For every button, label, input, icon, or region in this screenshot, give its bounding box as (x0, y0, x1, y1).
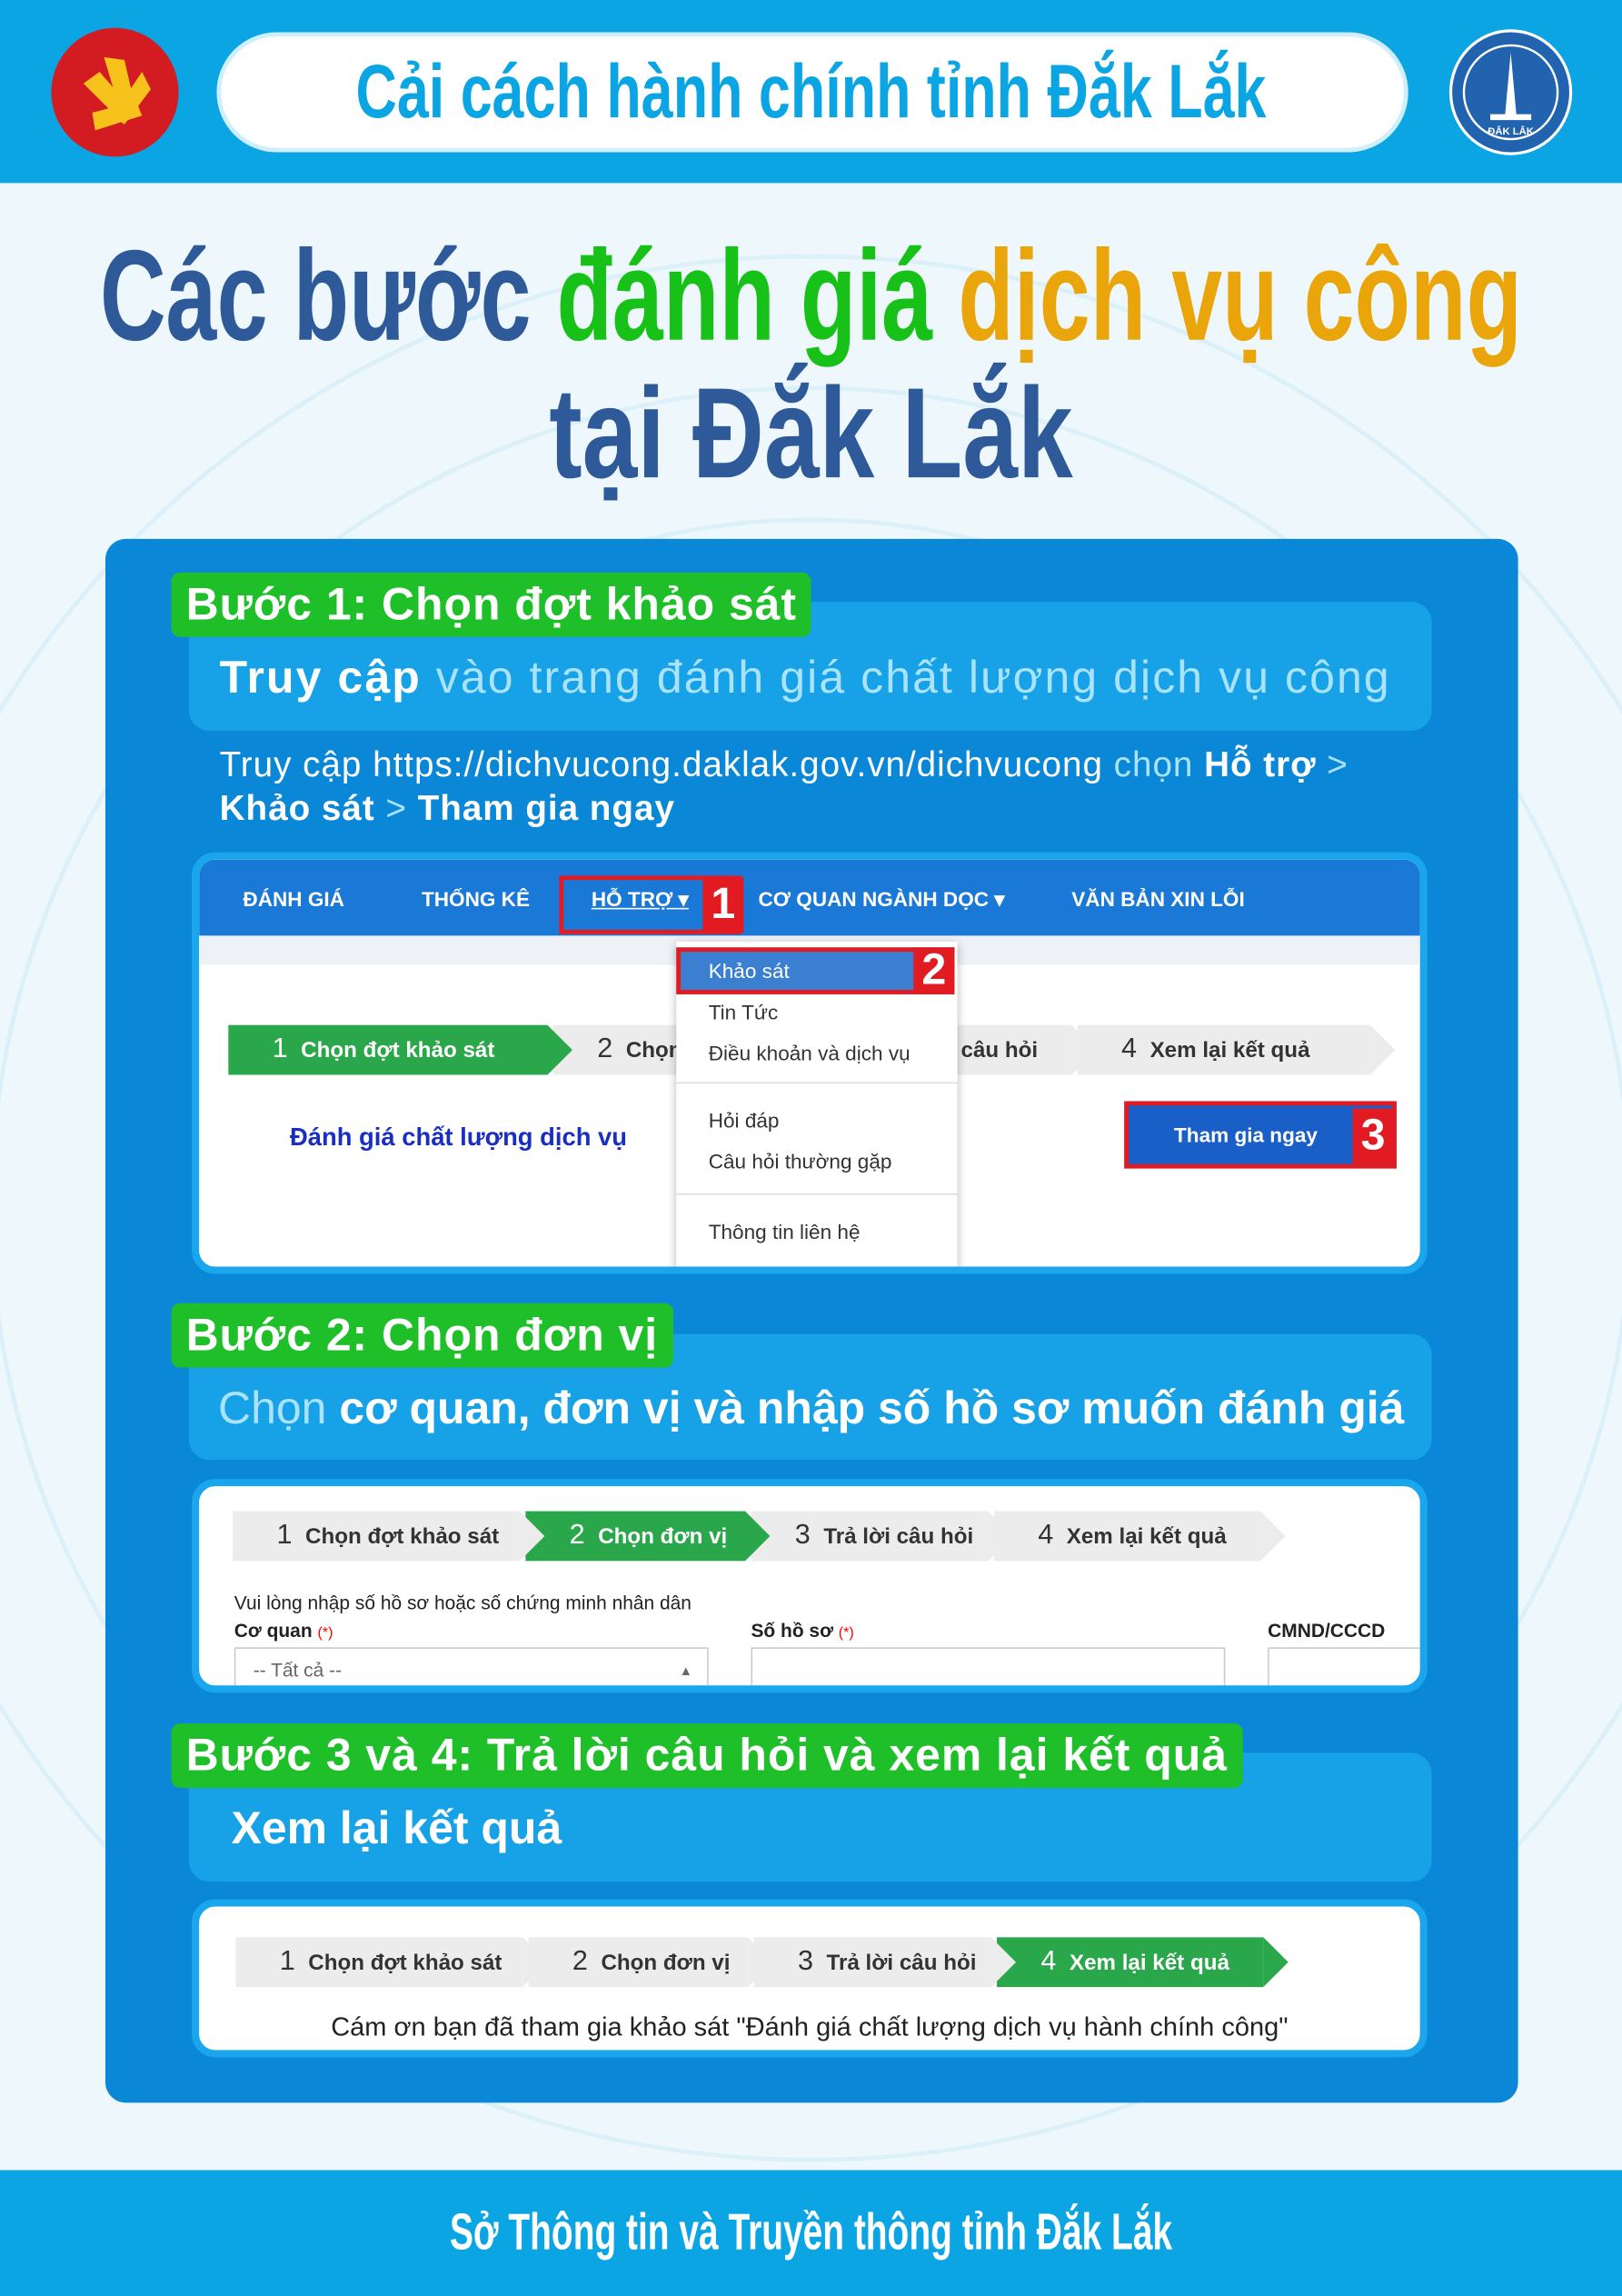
footer text: Sở Thông tin và Truyền thông tỉnh Đắk Lắk (450, 2204, 1172, 2261)
screenshot 3 (192, 1899, 1428, 2057)
screenshot 3: 3 Trả lời câu hỏi (798, 1946, 976, 1977)
screenshot 2: 4 Xem lại kết quả (1038, 1520, 1227, 1551)
nav bar: CƠ QUAN NGÀNH DỌC ▾ (758, 887, 1005, 911)
screenshot 2: CMND/CCCD (1268, 1620, 1385, 1642)
screenshot 1: 3 (1361, 1112, 1386, 1160)
progress steps: 1 Chọn đợt khảo sát (273, 1033, 494, 1064)
footer (0, 2171, 1622, 2296)
progress steps (228, 1025, 1395, 1074)
screenshot 3: 4 Xem lại kết quả (1040, 1946, 1229, 1977)
button: Tham gia ngay: Tham gia ngay (1174, 1123, 1318, 1146)
dropdown: Câu hỏi thường gặp (709, 1150, 891, 1173)
dropdown: Điều khoản và dịch vụ (709, 1041, 911, 1064)
step 1 subtitle (189, 602, 1432, 731)
dropdown (676, 942, 958, 1282)
nav bar (199, 860, 1428, 935)
icon: left logo (51, 28, 179, 156)
icon: right logo (1449, 29, 1572, 155)
main panel (105, 539, 1518, 2102)
step 1 url text: Khảo sát > Tham gia ngay (220, 789, 675, 829)
step 2 label: Bước 2: Chọn đơn vị (186, 1309, 658, 1361)
dropdown: Thông tin liên hệ (709, 1220, 861, 1243)
screenshot 1 (192, 853, 1428, 1274)
step 3-4 label: Bước 3 và 4: Trả lời câu hỏi và xem lại kết quả (186, 1730, 1228, 1781)
screenshot 1: Đánh giá chất lượng dịch vụ (290, 1123, 627, 1151)
progress steps: 4 Xem lại kết quả (1121, 1033, 1310, 1064)
screenshot 2 (192, 1479, 1428, 1692)
step 2 subtitle (189, 1334, 1432, 1460)
nav bar: HỖ TRỢ ▾ (592, 887, 689, 911)
nav bar: THỐNG KÊ (422, 887, 530, 911)
nav bar: ĐÁNH GIÁ (243, 887, 344, 911)
dropdown: Hỏi đáp (709, 1109, 779, 1132)
step 1 url text (220, 744, 1348, 829)
screenshot 2: 1 Chọn đợt khảo sát (276, 1520, 499, 1551)
screenshot 2: Cơ quan (*) (234, 1620, 333, 1642)
dropdown: Tin Tức (709, 1000, 778, 1023)
step 3-4 subtitle: Xem lại kết quả (232, 1802, 562, 1854)
header title pill (216, 32, 1408, 153)
nav bar: 1 (711, 880, 735, 928)
title line 1: Các bước đánh giá dịch vụ công (100, 223, 1522, 367)
icon: right logo: ĐẮK LẮK (1488, 125, 1535, 137)
progress steps: 2 Chọn đơn vị (597, 1033, 755, 1064)
screenshot 2: 2 Chọn đơn vị (570, 1520, 727, 1551)
screenshot 2: ▲ (680, 1663, 692, 1678)
screenshot 3: 2 Chọn đơn vị (572, 1946, 730, 1977)
header title text: Cải cách hành chính tỉnh Đắk Lắk (355, 50, 1266, 135)
header band (0, 0, 1622, 183)
step 1 label: Bước 1: Chọn đợt khảo sát (186, 578, 797, 630)
screenshot 2: -- Tất cả -- (254, 1659, 342, 1681)
title line 2: tại Đắk Lắk (549, 360, 1073, 505)
dropdown: Khảo sát (709, 959, 790, 983)
screenshot 3: 1 Chọn đợt khảo sát (280, 1946, 502, 1977)
screenshot 2: 3 Trả lời câu hỏi (795, 1520, 973, 1551)
step 1 subtitle: Truy cập vào trang đánh giá chất lượng dịch vụ công (220, 652, 1391, 703)
step 3-4 subtitle (189, 1752, 1432, 1882)
screenshot 3: Cám ơn bạn đã tham gia khảo sát "Đánh giá chất lượng dịch vụ hành chính công" (331, 2012, 1289, 2041)
nav bar: VĂN BẢN XIN LỖI (1071, 887, 1245, 911)
button: Tham gia ngay (1124, 1101, 1397, 1169)
progress steps: 3 Trả lời câu hỏi (860, 1033, 1038, 1064)
screenshot 2: Vui lòng nhập số hồ sơ hoặc số chứng minh nhân dân (234, 1592, 692, 1613)
dropdown: 2 (921, 946, 946, 994)
step 2 subtitle: Chọn cơ quan, đơn vị và nhập số hồ sơ muốn đánh giá (218, 1383, 1404, 1433)
step 1 url text: Truy cập https://dichvucong.daklak.gov.vn/dichvucong chọn Hỗ trợ > (220, 745, 1348, 784)
screenshot 2: Số hồ sơ (*) (751, 1620, 854, 1642)
